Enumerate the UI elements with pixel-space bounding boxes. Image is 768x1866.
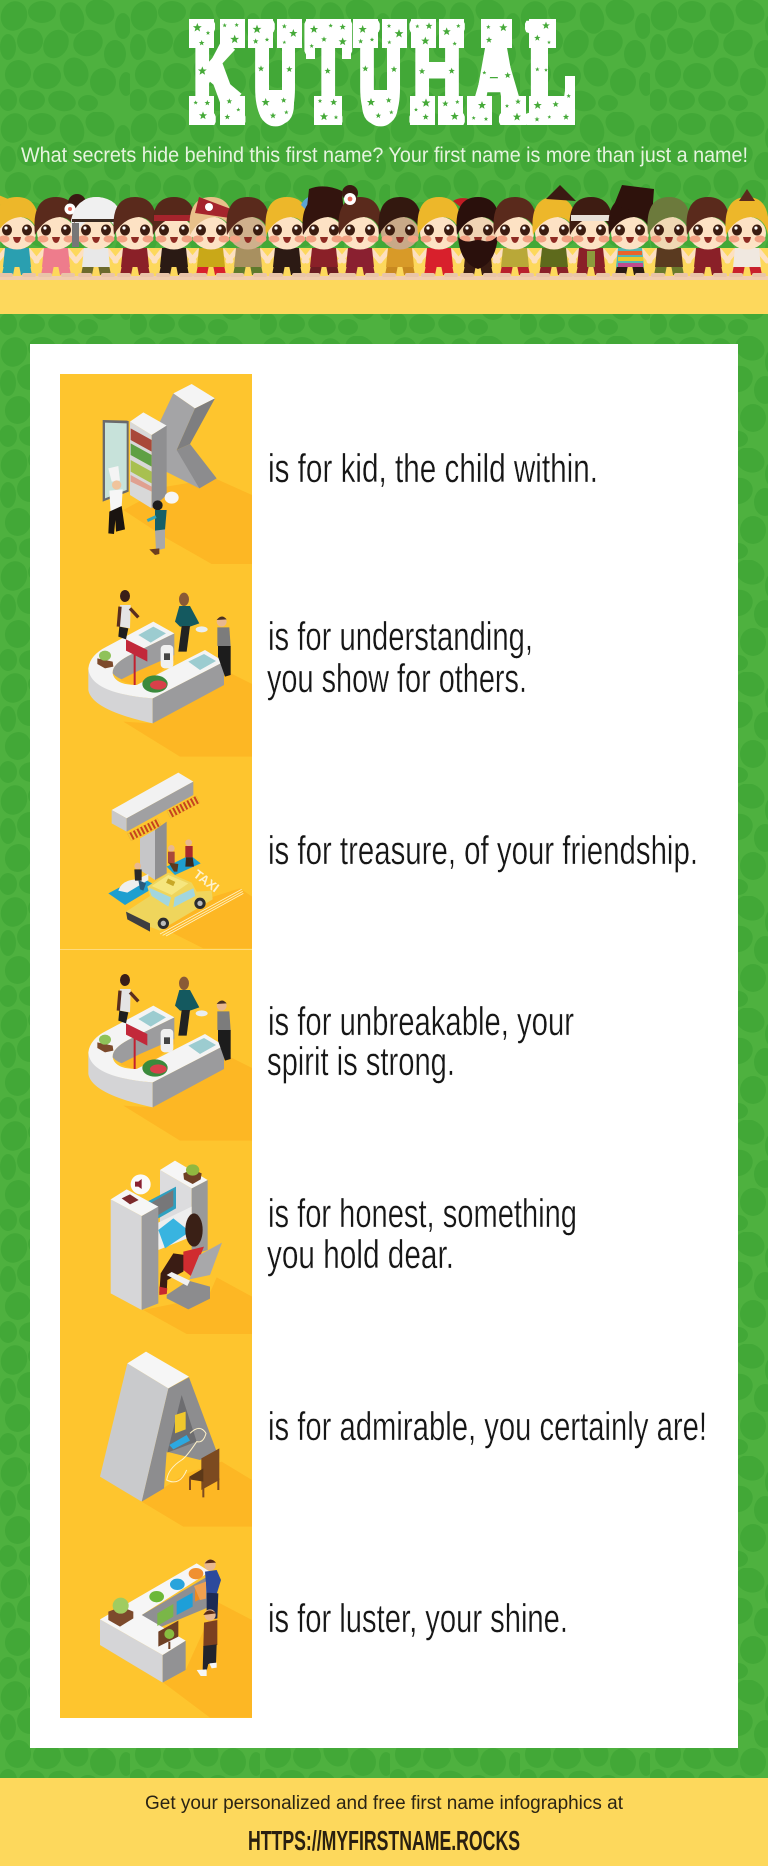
thin divider on yellow column <box>60 949 252 950</box>
taxi car <box>126 873 213 932</box>
title block serifs <box>189 19 575 125</box>
footer url: HTTPS://MYFIRSTNAME.ROCKS <box>248 1825 520 1856</box>
illustration: letter H with desk <box>111 1161 252 1334</box>
row U second text: is for unbreakable, your <box>268 1000 574 1044</box>
row U second text: spirit is strong. <box>267 1040 455 1084</box>
character 18 <box>647 197 691 277</box>
row L text: is for luster, your shine. <box>268 1597 568 1641</box>
character 8 <box>265 195 329 277</box>
character 20 <box>725 189 768 277</box>
character 3 <box>71 197 121 277</box>
character 2 <box>34 194 86 277</box>
parade of cartoon characters <box>0 185 768 277</box>
row U text: you show for others. <box>267 657 527 701</box>
yellow banner under characters <box>0 248 768 314</box>
character 4 <box>113 197 157 277</box>
row U text: is for understanding, <box>268 615 533 659</box>
footer <box>0 1778 768 1866</box>
character 12 <box>417 197 485 277</box>
character 11 <box>378 197 422 277</box>
row U second text <box>267 1000 574 1084</box>
row K text: is for kid, the child within. <box>268 447 598 491</box>
character 7 <box>226 197 270 277</box>
character 17 <box>608 185 654 277</box>
illustration: letter A with chair <box>100 1352 252 1527</box>
title star decorations: left half <box>193 23 381 120</box>
row H text: is for honest, something <box>268 1192 577 1236</box>
illustration: letter L with recycling bins <box>100 1559 252 1718</box>
title star decorations: right half <box>386 22 571 121</box>
row H text: you hold dear. <box>267 1233 454 1277</box>
character 15 <box>532 185 576 277</box>
character 14 <box>493 197 537 277</box>
row H text <box>267 1192 577 1277</box>
footer call to action: Get your personalized and free first name infographics at <box>145 1793 624 1814</box>
illustration: letter K with fridge <box>103 384 252 564</box>
character 13 <box>456 197 500 277</box>
illustration: letter U counter repeated <box>88 974 252 1141</box>
character 6 <box>189 197 237 277</box>
character 19 <box>686 197 730 277</box>
character 5 <box>152 197 196 277</box>
text rows <box>267 447 707 1641</box>
character 9 <box>302 186 346 277</box>
taxi text: TAXI <box>191 867 222 895</box>
row U text <box>267 615 533 701</box>
character 1 <box>0 191 39 277</box>
character 10 <box>338 185 382 277</box>
character 16 <box>569 197 613 277</box>
illustration: letter U counter <box>88 590 252 757</box>
white content panel <box>30 344 738 1748</box>
yellow illustration column <box>60 374 252 1718</box>
illustration: letter T with taxi <box>108 773 252 948</box>
